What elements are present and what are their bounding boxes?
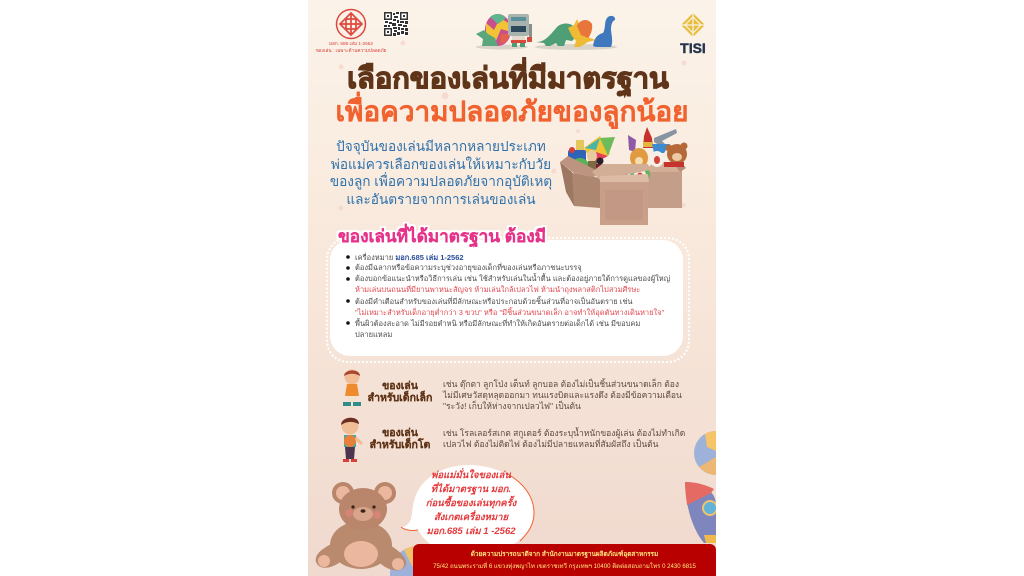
bubble message: มอก.685 เล่ม 1 -2562: [426, 526, 516, 537]
illustration: toy robot, egg and dinosaurs: [476, 14, 617, 50]
illustration: boxes of toys: [560, 127, 688, 225]
bullet 4: "ไม่เหมาะสำหรับเด็กอายุต่ำกว่า 3 ขวบ" หรือ "มีชิ้นส่วนขนาดเล็ก อาจทำให้อุดตันทางเดินหายใจ": [355, 308, 664, 317]
footer bar: [413, 544, 716, 576]
description: older children: [443, 427, 685, 449]
description: young children: "ระวัง! เก็บให้ห่างจากเปลวไฟ" เป็นต้น: [443, 401, 581, 411]
panel background: [330, 240, 683, 356]
footer line 1: ด้วยความปรารถนาดีจาก สำนักงานมาตรฐานผลิตภัณฑ์อุตสาหกรรม: [471, 551, 658, 558]
description: young children: เช่น ตุ๊กตา ลูกโป่ง เต็นท์ ลูกบอล ต้องไม่เป็นชิ้นส่วนขนาดเล็ก ต้อง: [443, 379, 679, 389]
speech bubble: [400, 465, 534, 544]
panel heading: ของเล่นที่ได้มาตรฐาน ต้องมี: [338, 226, 546, 246]
footer line 2: 75/42 ถนนพระรามที่ 6 แขวงทุ่งพญาไท เขตราชเทวี กรุงเทพฯ 10400 ติดต่อสอบถามโทร 0 2430 6815: [433, 564, 696, 570]
illustration: ball behind footer: [390, 546, 414, 576]
icon: TIS standard mark: [336, 8, 366, 40]
description: young children: ไม่มีเศษวัสดุหลุดออกมา ทนแรงบิดและแรงดึง ต้องมีข้อความเตือน: [443, 390, 682, 400]
description: young children: [442, 378, 682, 411]
panel: standard toy requirements: [326, 237, 690, 363]
bullet 4: ต้องมีคำเตือนสำหรับของเล่นที่มีลักษณะหรือประกอบด้วยชิ้นส่วนที่อาจเป็นอันตราย เช่น: [355, 297, 633, 306]
title line 2: เพื่อความปลอดภัยของลูกน้อย: [336, 96, 688, 127]
illustration: toy rocket: [685, 482, 716, 543]
bullet 5: [355, 318, 640, 339]
label: toys for older children: ของเล่น: [382, 427, 418, 439]
standard number caption: มอก. 685 เล่ม 1-2562: [329, 41, 373, 46]
label: toys for older children: สำหรับเด็กโต: [370, 439, 430, 451]
icon: older child: [341, 418, 363, 462]
title line 1: เลือกของเล่นที่มีมาตรฐาน: [347, 63, 669, 95]
intro text: ของลูก เพื่อความปลอดภัยจากอุบัติเหตุ: [330, 174, 552, 189]
description: older children: เช่น โรลเลอร์สเกต สกูเตอร์ ต้องระบุน้ำหนักของผู้เล่น ต้องไม่ทำเกิด: [443, 428, 685, 438]
bullet 3: ห้ามเล่นบนถนนที่มียานพาหนะสัญจร ห้ามเล่นใกล้เปลวไฟ ห้ามนำถุงพลาสติกไปสวมศีรษะ: [355, 285, 640, 294]
illustration: beach ball: [694, 431, 716, 475]
intro text: พ่อแม่ควรเลือกของเล่นให้เหมาะกับวัย: [331, 157, 551, 172]
bullet 4: [355, 296, 664, 318]
label: toys for young children: ของเล่น: [382, 380, 418, 392]
label: toys for older children: [370, 427, 430, 451]
bullet 5: ปลายแหลม: [355, 330, 392, 339]
illustration: teddy bear: [316, 482, 406, 570]
intro text: และอันตรายจากการเล่นของเล่น: [346, 192, 536, 207]
intro text: ปัจจุบันของเล่นมีหลากหลายประเภท: [336, 139, 546, 154]
poster: [308, 0, 716, 576]
panel dotted border: [326, 237, 690, 363]
requirement list: [346, 252, 670, 339]
icon: small child: [343, 370, 361, 406]
bubble message: ก่อนซื้อของเล่นทุกครั้ง: [426, 498, 516, 509]
intro text: [330, 139, 552, 207]
label: toys for young children: [368, 380, 432, 404]
icon: TISI logo: [682, 14, 704, 36]
bubble message: พ่อแม่มั่นใจของเล่น: [431, 470, 511, 481]
bubble message: สังเกตเครื่องหมาย: [434, 512, 508, 523]
bullet 3: ต้องบอกข้อแนะนำหรือวิธีการเล่น เช่น ใช้สำหรับเล่นในน้ำตื้น และต้องอยู่ภายใต้การดูแลของผู้ใหญ่: [355, 274, 670, 283]
bullet 2: ต้องมีฉลากหรือข้อความระบุช่วงอายุของเด็กที่ของเล่นหรือภาชนะบรรจุ: [355, 263, 582, 272]
description: older children: เปลวไฟ ต้องไม่ติดไฟ ต้องไม่มีปลายแหลมที่สัมผัสถึง เป็นต้น: [443, 439, 658, 449]
bullet dots: [346, 255, 350, 325]
standard number caption: ของเล่น : เฉพาะด้านความปลอดภัย: [316, 48, 386, 53]
bullet 1: เครื่องหมาย มอก.685 เล่ม 1-2562: [355, 253, 464, 262]
title: [336, 57, 688, 129]
icon: QR code: [384, 12, 408, 36]
logo wordmark: TISI: [680, 40, 706, 56]
bubble message: [426, 468, 517, 537]
label: toys for young children: สำหรับเด็กเล็ก: [368, 392, 432, 404]
standard number caption: [316, 41, 386, 53]
bubble message: ที่ได้มาตรฐาน มอก.: [431, 484, 511, 495]
bullet 5: พื้นผิวต้องสะอาด ไม่มีรอยตำหนิ หรือมีลักษณะที่ทำให้เกิดอันตรายต่อเด็กได้ เช่น มีขอบคม: [355, 319, 640, 328]
bullet 3: [355, 273, 670, 294]
